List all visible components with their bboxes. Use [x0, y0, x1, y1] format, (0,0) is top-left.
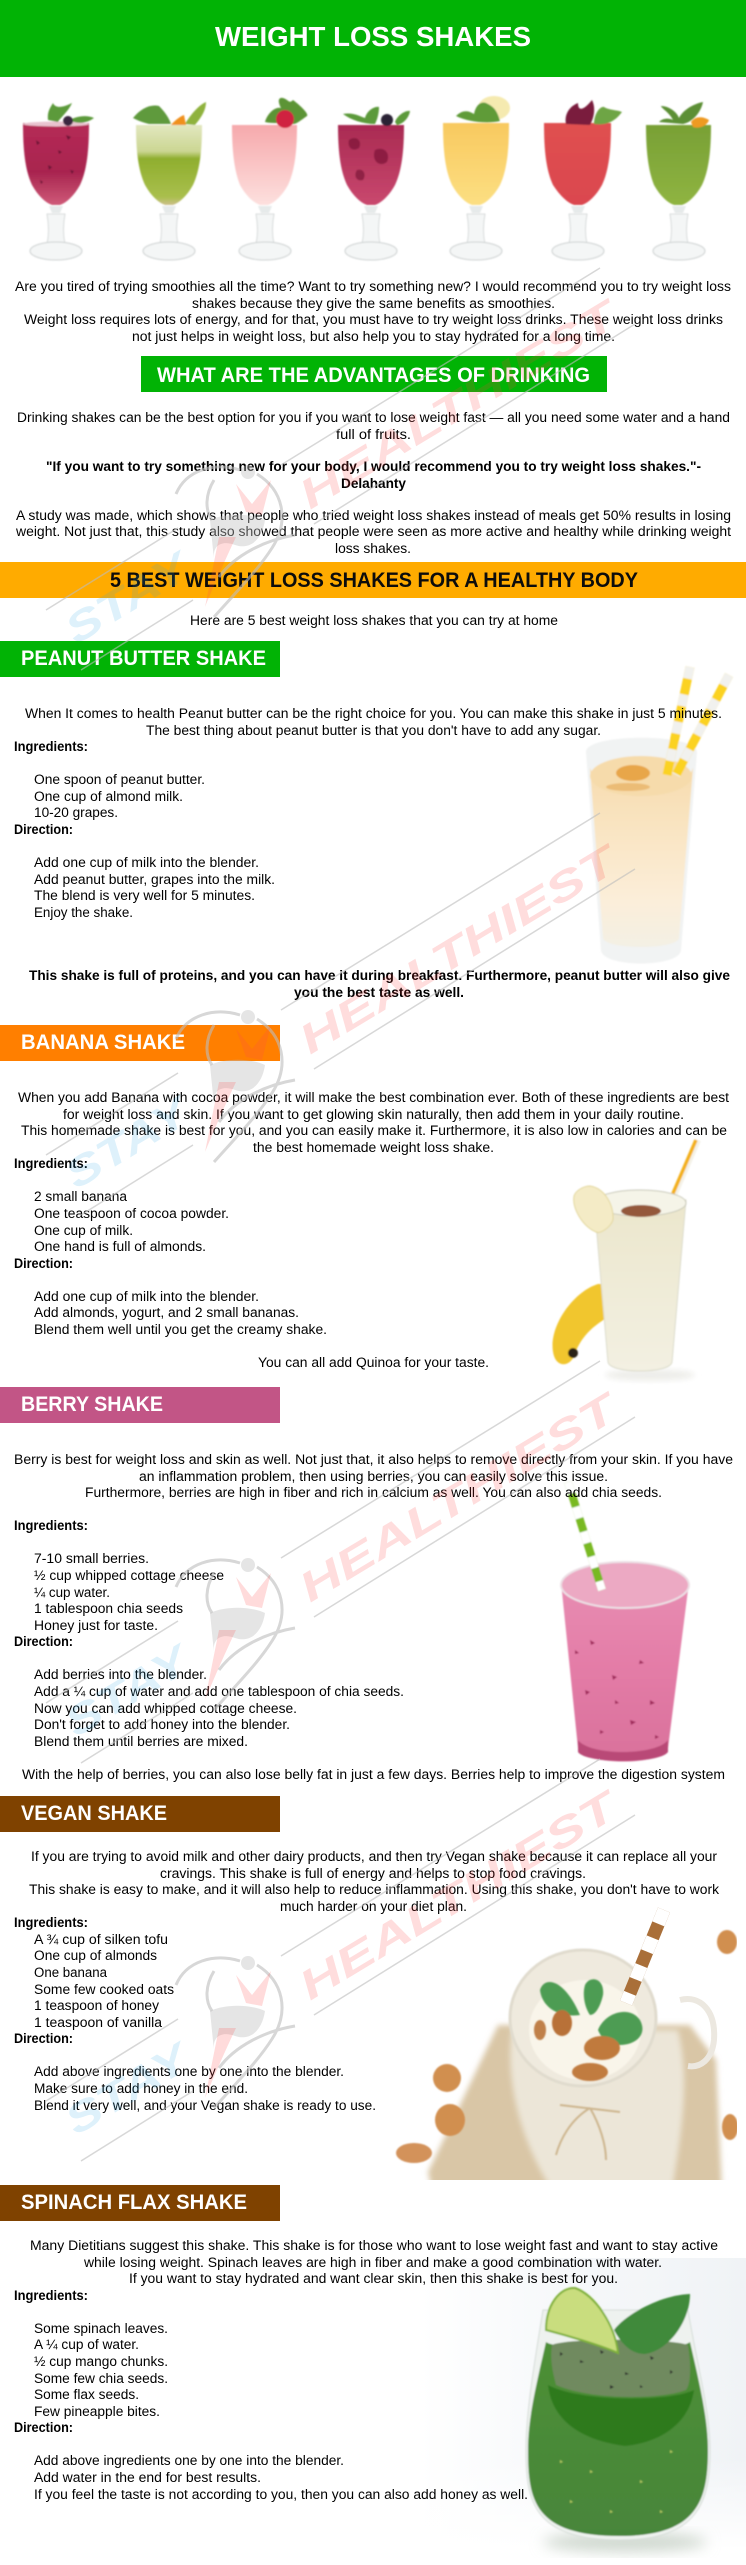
text: banana directions: Add one cup of milk into the blender.: [34, 1289, 259, 1304]
text: berry intro: Berry is best for weight loss and skin as well. Not just that, it also helps to remove directly from your skin. If you have: [14, 1452, 733, 1467]
text: banana ingredients: Ingredients:: [14, 1156, 88, 1171]
study text: weight. Not just that, this study also showed that people were seen as more active and healthy while drinking weight: [15, 524, 731, 539]
text: berry directions: Blend them until berries are mixed.: [34, 1734, 248, 1749]
heading: berry shake: [0, 1387, 280, 1423]
text: berry directions: [14, 1634, 404, 1749]
text: vegan intro: [29, 1849, 719, 1914]
panel: berry shake: [0, 1387, 733, 1782]
panel: spinach flax shake: [0, 2185, 746, 2565]
text: berry ingredients: 1 tablespoon chia seeds: [34, 1601, 183, 1616]
text: vegan directions: Direction:: [14, 2031, 73, 2046]
glass 1: berry: [23, 103, 94, 260]
watermark 4: HEALTHIEST: [291, 1781, 628, 2009]
text: peanut closing: you the best taste as well.: [294, 985, 464, 1000]
heading: peanut butter shake: PEANUT BUTTER SHAKE: [21, 647, 266, 670]
title banner: WEIGHT LOSS SHAKES: [215, 21, 531, 52]
heading: five best shakes: [0, 562, 746, 598]
heading: vegan shake: [0, 1796, 280, 1832]
glass 5: yellow: [443, 96, 510, 260]
text: vegan directions: [14, 2031, 376, 2113]
text: vegan ingredients: Some few cooked oats: [34, 1982, 174, 1997]
text: banana ingredients: One teaspoon of cocoa powder.: [34, 1206, 229, 1221]
glass 2: green layered: [133, 102, 206, 260]
row of seven smoothie glasses: [23, 96, 711, 260]
text: peanut closing: This shake is full of proteins, and you can have it during breakfast. Furthermore, peanut butter will also give: [29, 968, 730, 983]
image: spinach shake on pale background: [420, 2258, 746, 2565]
text: spinach intro: while losing weight. Spinach leaves are high in fiber and make a good combination with water.: [83, 2255, 662, 2270]
text: banana intro: for weight loss and skin. If you want to get glowing skin naturally, then add them in your daily routine.: [63, 1107, 684, 1122]
text: banana intro: When you add Banana with cocoa powder, it will make the best combination ever. Both of these ingredients are best: [18, 1090, 729, 1105]
quote: [46, 459, 701, 491]
text: banana intro: This homemade shake is best for you, and you can easily make it. Furthermore, it is also low in calories and can be: [21, 1123, 727, 1138]
quote: Delahanty: [341, 476, 407, 491]
text: peanut ingredients: One cup of almond milk.: [34, 789, 183, 804]
text: spinach directions: [14, 2420, 528, 2502]
text: berry ingredients: [14, 1518, 224, 1633]
text: spinach intro: Many Dietitians suggest this shake. This shake is for those who want to lose weight fast and want to stay active: [30, 2238, 718, 2253]
intro text: [15, 279, 731, 344]
glass 3: pink: [232, 98, 307, 260]
text: spinach intro: If you want to stay hydrated and want clear skin, then this shake is best for you.: [129, 2271, 618, 2286]
text: vegan ingredients: 1 teaspoon of vanilla: [34, 2015, 163, 2030]
image: banana shake glass: [553, 1140, 698, 1381]
text: vegan intro: much harder on your diet plan.: [280, 1899, 467, 1914]
glass 7: green: [646, 102, 711, 260]
watermark 3: HEALTHIEST: [291, 1383, 628, 1611]
text: spinach directions: Add water in the end for best results.: [34, 2470, 261, 2485]
text: peanut directions: [14, 822, 275, 920]
text: vegan intro: cravings. This shake is full of energy and helps to stop food cravings.: [160, 1866, 586, 1881]
text: spinach directions: Direction:: [14, 2420, 73, 2435]
text: banana closing: You can all add Quinoa for your taste.: [258, 1355, 489, 1370]
glass 6: red: [544, 100, 622, 260]
heading: vegan shake: VEGAN SHAKE: [21, 1802, 167, 1825]
heading: spinach flax shake: SPINACH FLAX SHAKE: [21, 2191, 247, 2214]
watermark 4: STAY: [57, 2032, 200, 2144]
watermark 3: [46, 1361, 635, 1763]
text: peanut ingredients: Ingredients:: [14, 739, 88, 754]
text: banana directions: [14, 1256, 327, 1337]
text: peanut ingredients: [14, 739, 205, 820]
text: vegan directions: Blend it very well, and your Vegan shake is ready to use.: [34, 2098, 376, 2113]
image: peanut butter glass: [586, 667, 729, 964]
heading: five best shakes: 5 BEST WEIGHT LOSS SHAKES FOR A HEALTHY BODY: [110, 569, 638, 592]
text: banana ingredients: One cup of milk.: [34, 1223, 133, 1238]
advantages text: [17, 410, 730, 442]
heading: advantages: [141, 356, 607, 392]
text: berry ingredients: Ingredients:: [14, 1518, 88, 1533]
image: berry glass: [561, 1482, 689, 1762]
text: vegan directions: Add above ingredients one by one into the blender.: [34, 2064, 344, 2079]
text: peanut directions: Enjoy the shake.: [34, 905, 133, 920]
text: vegan ingredients: One banana: [34, 1965, 108, 1980]
advantages text: full of fruits.: [336, 427, 411, 442]
text: spinach ingredients: [14, 2288, 168, 2419]
text: banana intro: [18, 1090, 729, 1155]
text: banana intro: the best homemade weight loss shake.: [253, 1140, 494, 1155]
watermark 3: STAY: [57, 1634, 200, 1746]
text: berry directions: Don't forget to add honey into the blender.: [34, 1717, 290, 1732]
panel: vegan shake: [0, 1796, 738, 2190]
text: berry closing: With the help of berries, you can also lose belly fat in just a few days. Berries help to improve the digestion system: [22, 1767, 725, 1782]
panel: peanut butter shake: [0, 641, 730, 1000]
five best intro: Here are 5 best weight loss shakes that you can try at home: [190, 613, 558, 628]
text: berry directions: Now you can add whipped cottage cheese.: [34, 1701, 297, 1716]
text: banana ingredients: 2 small banana: [34, 1189, 128, 1204]
watermark 1: STAY: [57, 541, 200, 653]
watermark 2: [46, 813, 635, 1215]
text: peanut directions: Add one cup of milk into the blender.: [34, 855, 259, 870]
watermark 4: [46, 1759, 635, 2161]
text: peanut directions: Direction:: [14, 822, 73, 837]
glass 4: dark berry: [338, 107, 410, 260]
text: peanut ingredients: 10-20 grapes.: [34, 805, 118, 820]
text: spinach ingredients: A ¼ cup of water.: [34, 2337, 139, 2352]
text: vegan ingredients: A ¾ cup of silken tofu: [34, 1932, 168, 1947]
text: spinach ingredients: Some spinach leaves.: [34, 2321, 168, 2336]
text: spinach ingredients: ½ cup mango chunks.: [34, 2354, 168, 2369]
text: berry ingredients: Honey just for taste.: [34, 1618, 158, 1633]
text: vegan ingredients: 1 teaspoon of honey: [34, 1998, 159, 2013]
text: vegan intro: If you are trying to avoid milk and other dairy products, and then try Vegan shake because it can replace all your: [31, 1849, 718, 1864]
text: spinach ingredients: Few pineapple bites.: [34, 2404, 160, 2419]
heading: berry shake: BERRY SHAKE: [21, 1393, 163, 1416]
text: banana directions: Add almonds, yogurt, and 2 small bananas.: [34, 1305, 299, 1320]
text: spinach directions: If you feel the taste is not according to you, then you can also add honey as well.: [34, 2487, 528, 2502]
study text: A study was made, which shows that people who tried weight loss shakes instead of meals get 50% results in losing: [16, 508, 731, 523]
text: vegan ingredients: Ingredients:: [14, 1915, 88, 1930]
heading: peanut butter shake: [0, 641, 280, 677]
text: vegan ingredients: One cup of almonds: [34, 1948, 157, 1963]
text: berry directions: Direction:: [14, 1634, 73, 1649]
text: peanut intro: The best thing about peanut butter is that you don't have to add any sugar.: [146, 723, 601, 738]
text: peanut intro: [25, 706, 722, 738]
intro text: Weight loss requires lots of energy, and for that, you must have to try weight loss drinks. These weight loss drinks: [24, 312, 723, 327]
quote: "If you want to try something new for your body, I would recommend you to try weight loss shakes."-: [46, 459, 701, 474]
intro text: not just helps in weight loss, but also help you to stay hydrated for a long time.: [132, 329, 615, 344]
heading: banana shake: BANANA SHAKE: [21, 1031, 185, 1054]
intro text: Are you tired of trying smoothies all the time? Want to try something new? I would recommend you to try weight loss: [15, 279, 731, 294]
heading: banana shake: [0, 1025, 280, 1061]
text: berry ingredients: 7-10 small berries.: [34, 1551, 149, 1566]
heading: advantages: WHAT ARE THE ADVANTAGES OF DRINKING: [157, 364, 590, 387]
text: vegan ingredients: [14, 1915, 174, 2030]
study text: [15, 508, 731, 556]
text: berry intro: Furthermore, berries are high in fiber and rich in calcium as well. You can also add chia seeds.: [85, 1485, 662, 1500]
heading: spinach flax shake: [0, 2185, 280, 2221]
text: banana ingredients: One hand is full of almonds.: [34, 1239, 206, 1254]
text: berry directions: Add a ¼ cup of water and add one tablespoon of chia seeds.: [34, 1684, 404, 1699]
text: berry intro: [14, 1452, 733, 1500]
panel: banana shake: [0, 1025, 729, 1381]
text: peanut closing: [29, 968, 730, 1000]
text: peanut directions: The blend is very well for 5 minutes.: [34, 888, 255, 903]
intro text: shakes because they give the same benefits as smoothies.: [192, 296, 555, 311]
advantages text: Drinking shakes can be the best option for you if you want to lose weight fast — all you need some water and a hand: [17, 410, 730, 425]
study text: loss shakes.: [335, 541, 411, 556]
text: banana directions: Blend them well until you get the creamy shake.: [34, 1322, 327, 1337]
text: peanut intro: When It comes to health Peanut butter can be the right choice for you. You can make this shake in just 5 minutes.: [25, 706, 722, 721]
text: banana directions: Direction:: [14, 1256, 73, 1271]
watermark 1: [46, 268, 635, 670]
text: peanut directions: Add peanut butter, grapes into the milk.: [34, 872, 275, 887]
text: berry ingredients: ½ cup whipped cottage cheese: [34, 1568, 224, 1583]
watermark 1: HEALTHIEST: [291, 290, 628, 518]
text: banana ingredients: [14, 1156, 229, 1254]
text: vegan directions: Make sure to add honey in the end.: [34, 2081, 248, 2096]
title banner: [0, 0, 746, 77]
text: spinach ingredients: Some few chia seeds.: [34, 2371, 168, 2386]
watermark 2: STAY: [57, 1086, 200, 1198]
watermark 2: HEALTHIEST: [291, 835, 628, 1063]
text: berry ingredients: ¼ cup water.: [34, 1585, 110, 1600]
text: spinach ingredients: Ingredients:: [14, 2288, 88, 2303]
text: vegan intro: This shake is easy to make, and it will also help to reduce inflammation. Using this shake, you don't have to work: [29, 1882, 719, 1897]
image: vegan jar with almonds: [396, 1910, 738, 2190]
text: spinach intro: [30, 2238, 718, 2286]
text: berry directions: Add berries into the blender.: [34, 1667, 207, 1682]
text: berry intro: an inflammation problem, then using berries, you can easily solve this issue.: [139, 1469, 608, 1484]
text: spinach ingredients: Some flax seeds.: [34, 2387, 139, 2402]
text: spinach directions: Add above ingredients one by one into the blender.: [34, 2453, 344, 2468]
text: peanut ingredients: One spoon of peanut butter.: [34, 772, 205, 787]
